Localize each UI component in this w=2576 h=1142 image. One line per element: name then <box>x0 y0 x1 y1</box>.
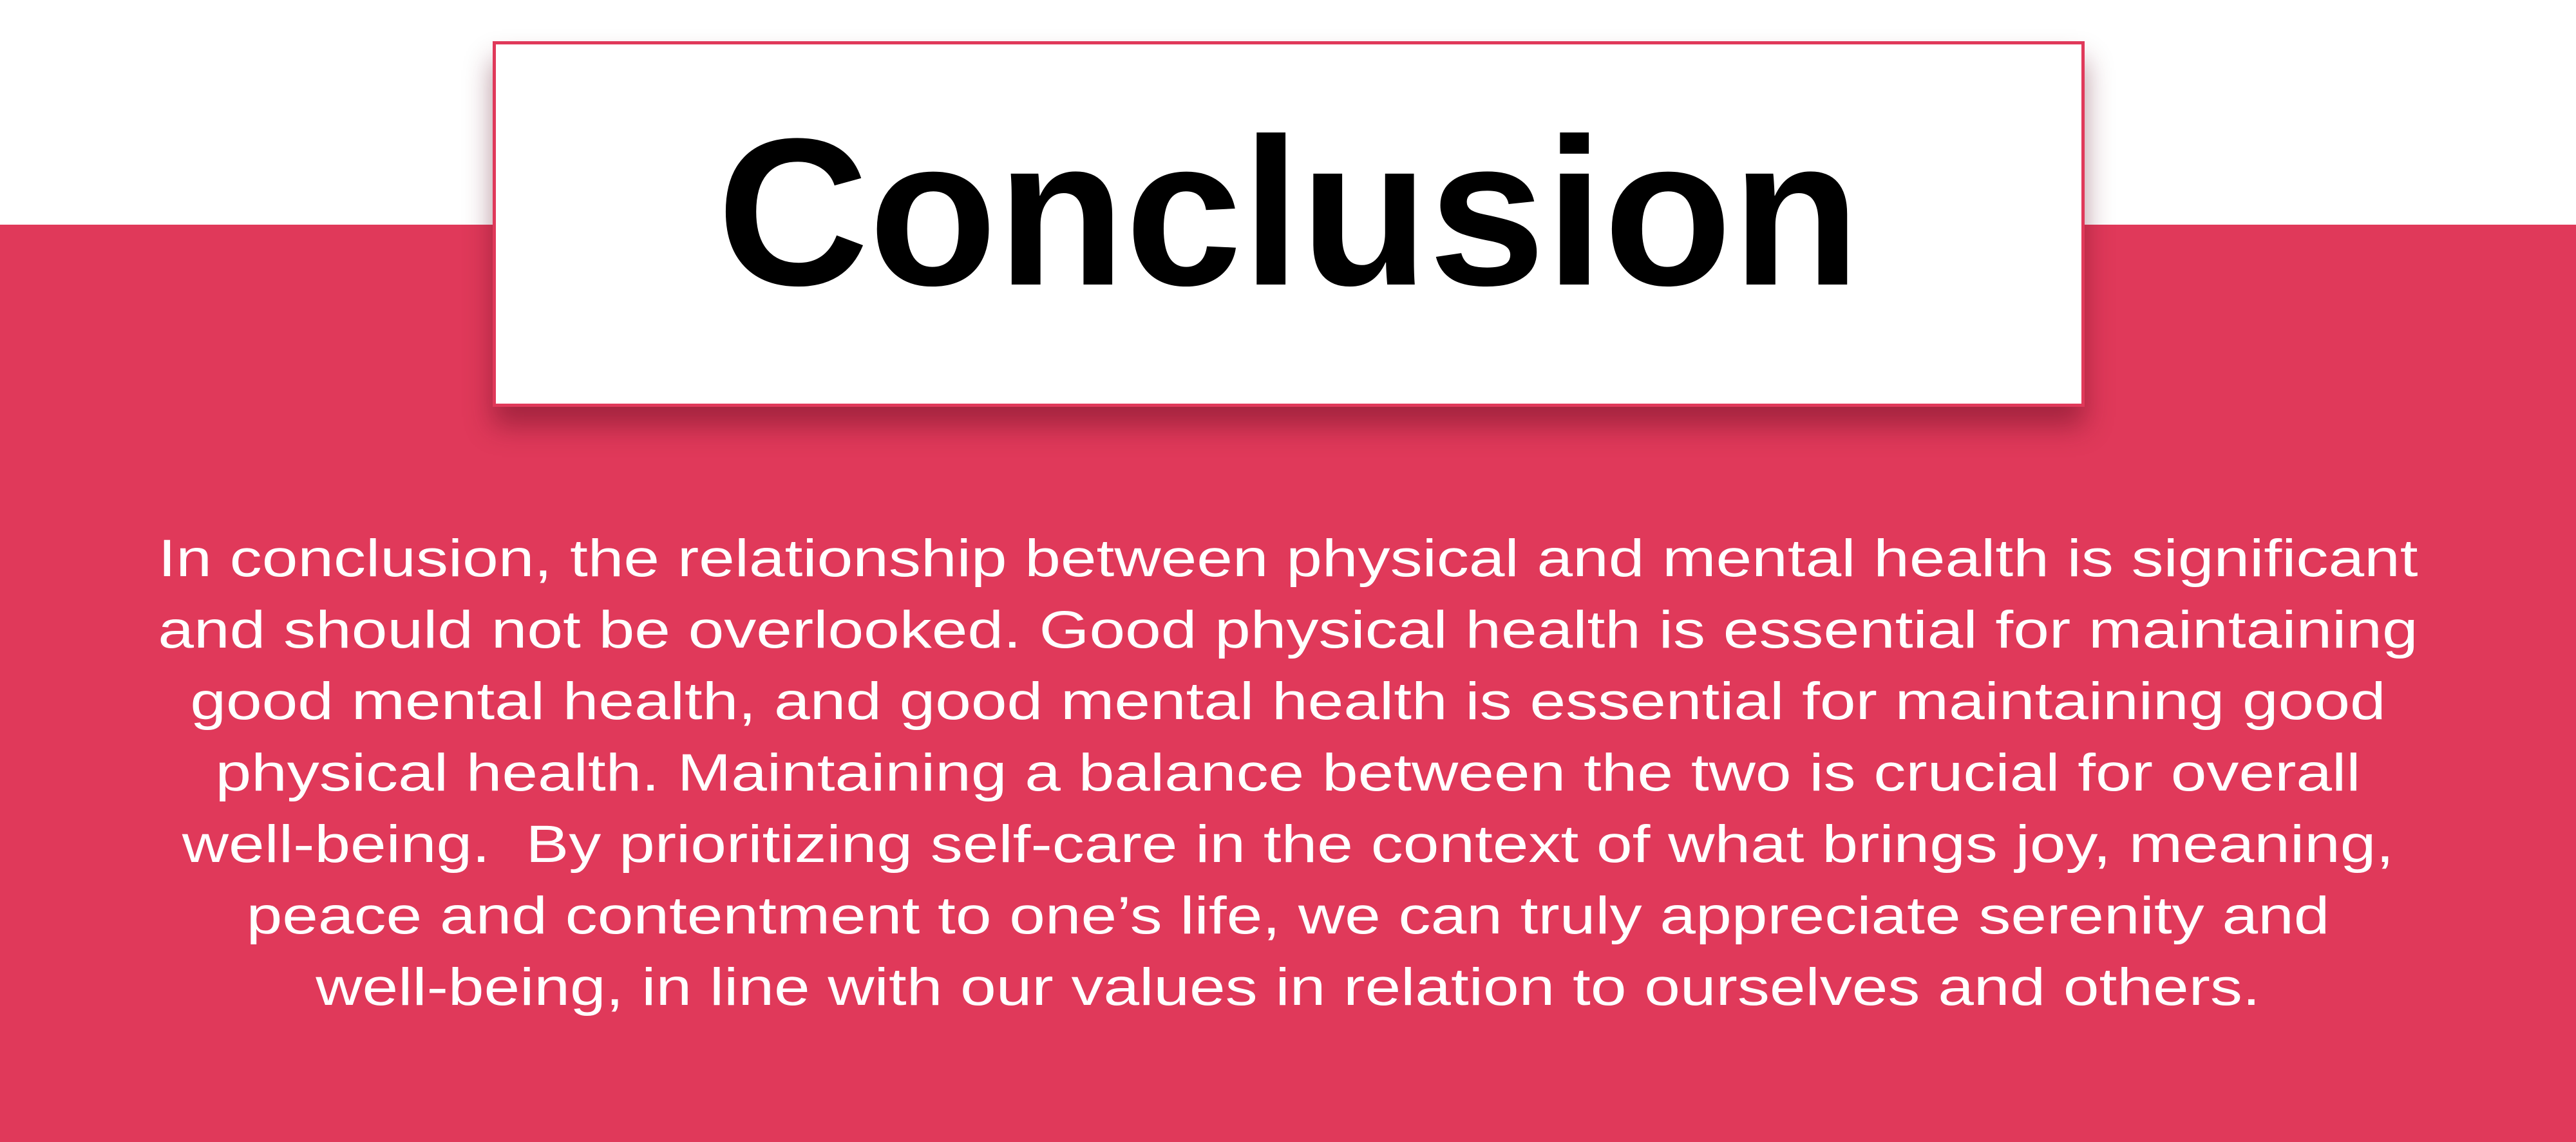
text block: conclusion paragraph: peace and contentment to one’s life, we can truly appreciate serenity and <box>247 886 2329 945</box>
text block: conclusion paragraph: well-being, in line with our values in relation to ourselves and others. <box>316 958 2260 1016</box>
text block: conclusion paragraph: In conclusion, the relationship between physical and mental health is significant <box>158 529 2418 588</box>
title box <box>493 41 2085 407</box>
text block: conclusion paragraph: good mental health, and good mental health is essential for maintaining good <box>190 672 2386 731</box>
text block: conclusion paragraph: well-being. By prioritizing self-care in the context of what brings joy, meaning, <box>182 815 2394 874</box>
text block: conclusion paragraph: and should not be overlooked. Good physical health is essential for maintaining <box>158 601 2418 659</box>
text block: conclusion paragraph <box>158 529 2418 1016</box>
title: Conclusion <box>717 95 1860 330</box>
text block: conclusion paragraph: physical health. Maintaining a balance between the two is crucial for overall <box>216 744 2360 802</box>
